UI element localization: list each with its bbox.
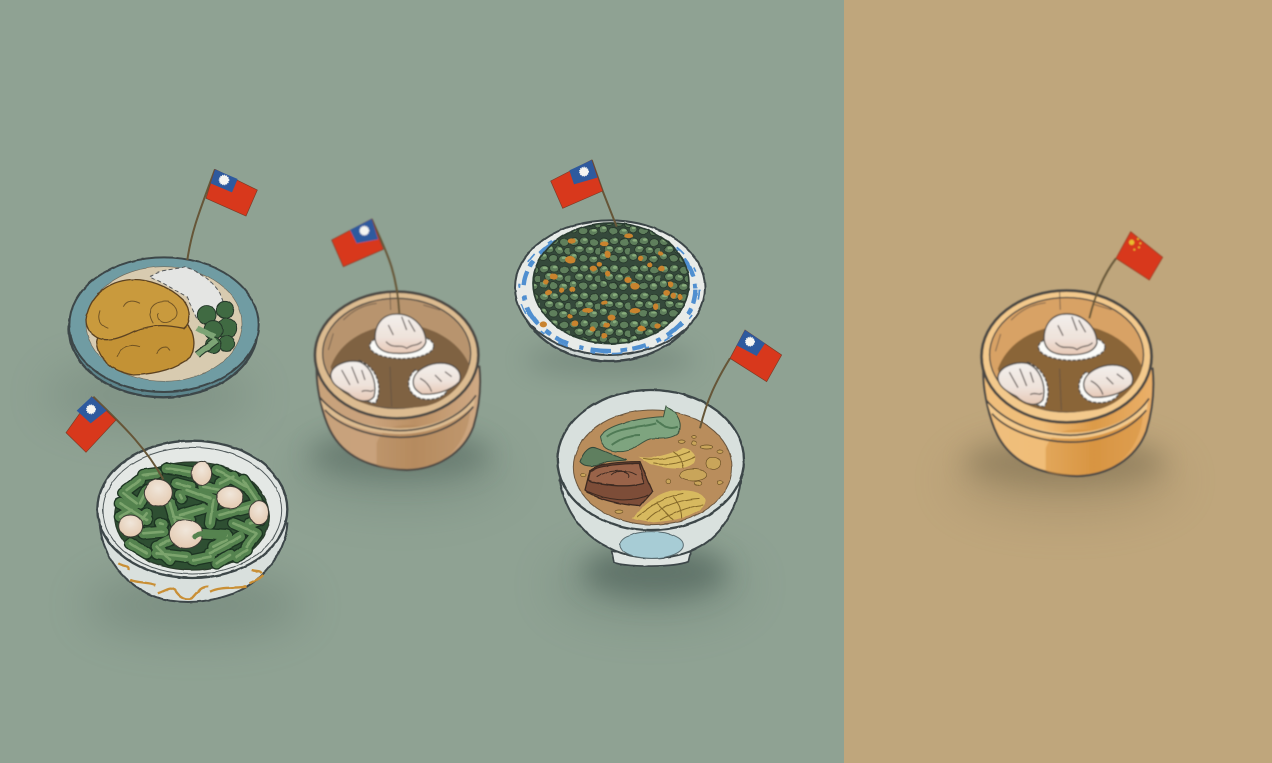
cutlet — [86, 280, 194, 375]
orange pieces — [540, 233, 682, 339]
dish: greens and meatball bowl — [66, 397, 287, 602]
broccoli — [197, 301, 237, 355]
background: green panel — [0, 0, 844, 763]
yellow stars — [1129, 238, 1141, 251]
flag: Taiwan flag on pole — [66, 397, 163, 479]
noodles — [632, 448, 706, 522]
flag: Taiwan flag on pole — [187, 169, 257, 260]
dish: steamer basket with China flag — [982, 232, 1163, 476]
basket — [982, 291, 1153, 476]
basket — [315, 292, 480, 470]
dish: beef noodle soup bowl — [557, 330, 782, 566]
soup — [573, 410, 732, 525]
bowl rim — [97, 441, 287, 578]
bok choy — [600, 406, 680, 452]
peas mound — [533, 223, 689, 344]
dish: cutlet rice plate — [69, 169, 259, 397]
flag: Taiwan flag on pole — [332, 219, 399, 313]
rice — [150, 267, 225, 318]
flag: Taiwan flag on pole — [551, 160, 617, 227]
flag: Taiwan flag on pole — [700, 330, 782, 428]
bowl rim and interior — [557, 390, 744, 530]
greens — [115, 462, 269, 570]
gold decoration — [118, 563, 263, 599]
braised beef — [585, 462, 653, 506]
meatballs — [119, 461, 269, 548]
flag: China flag on pole — [1089, 232, 1163, 318]
bowl body — [560, 480, 741, 558]
shadows under the tan panel dish — [950, 438, 1180, 518]
bowl foot — [612, 552, 691, 566]
shadows under the green panel dishes — [45, 344, 750, 637]
soup garnish — [581, 435, 723, 513]
blue base glaze — [620, 532, 683, 558]
bowl body — [100, 523, 287, 602]
dish: steamer basket with Taiwan flag — [315, 219, 480, 470]
plate — [515, 220, 705, 361]
front green stem — [195, 533, 225, 537]
dish: fried peas plate — [515, 160, 705, 361]
herb sprig — [580, 447, 627, 466]
plate — [69, 257, 259, 397]
background: tan panel — [844, 0, 1272, 763]
